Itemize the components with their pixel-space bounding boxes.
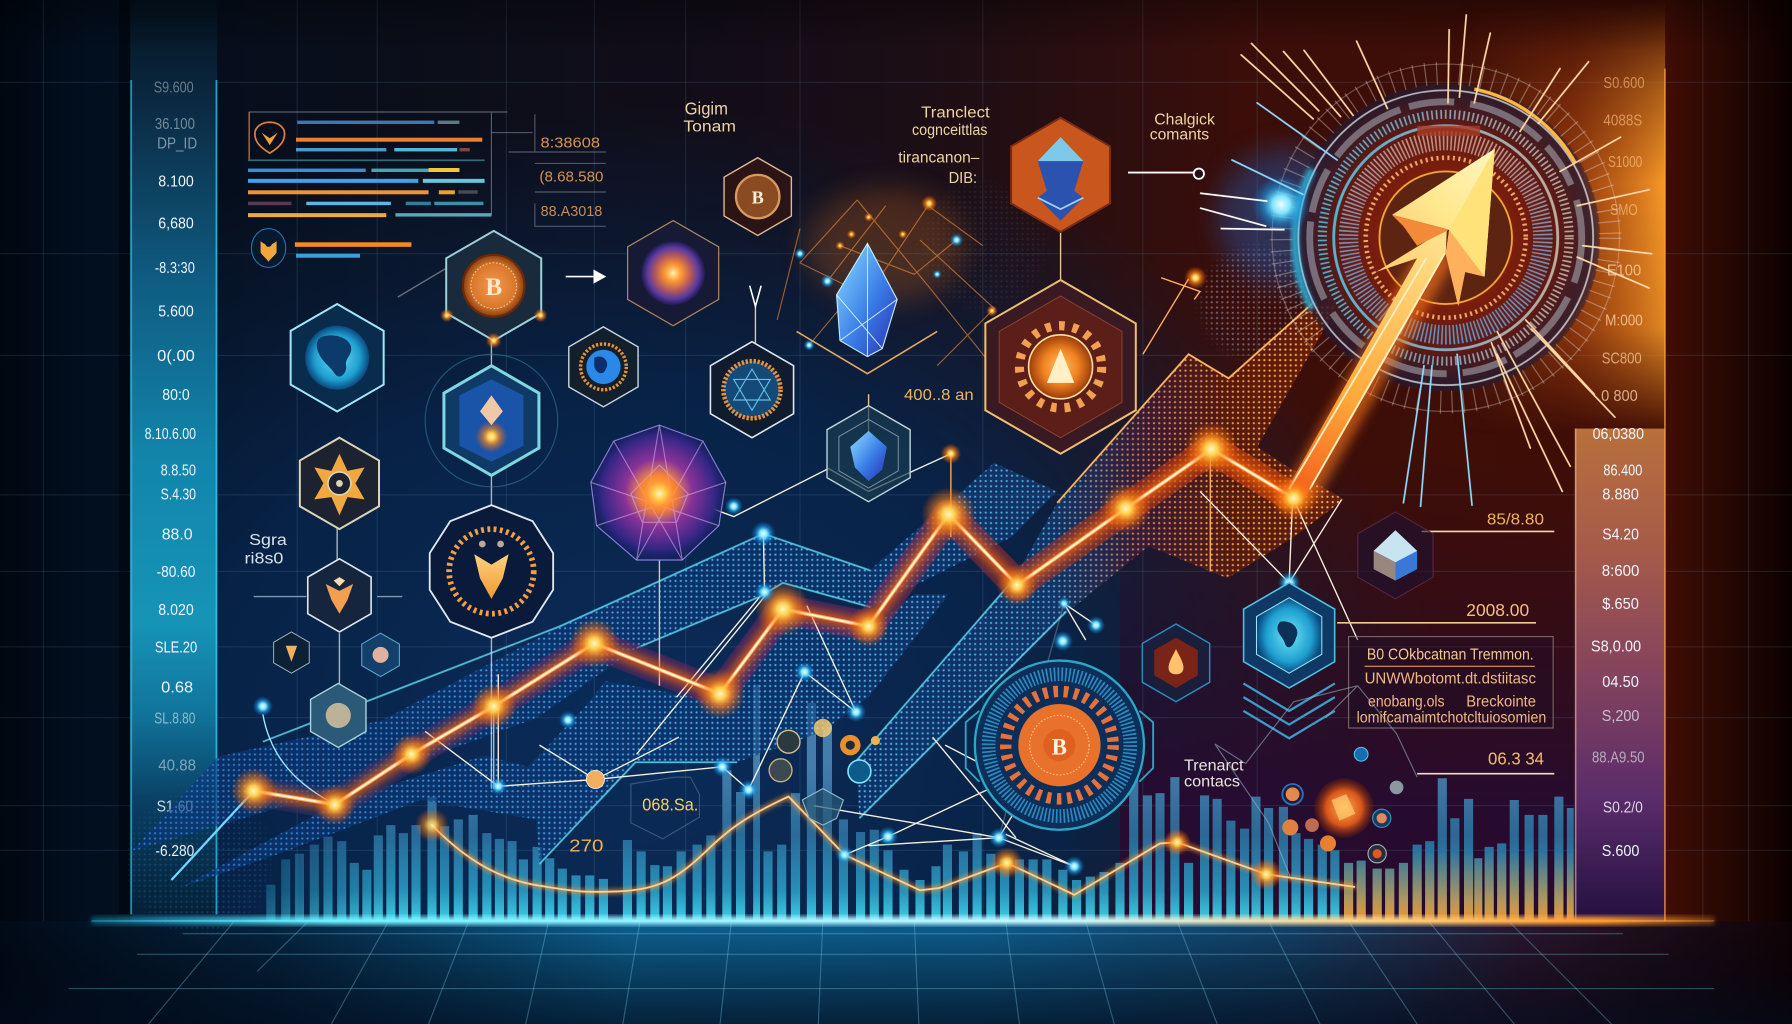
left scale labels: 8.020 (158, 602, 194, 619)
icon: small coin B hexagon: B (752, 187, 764, 207)
right scale labels: S0.600 (1603, 75, 1645, 92)
right scale labels (1591, 75, 1645, 860)
left scale labels: 40.88 (158, 757, 196, 774)
right scale labels: S4.20 (1602, 526, 1639, 543)
left scale labels: S9.600 (154, 80, 194, 97)
icon: large coin dial: B (1052, 734, 1067, 759)
right callouts: 2008.00 (1466, 600, 1529, 620)
right scale labels: SC800 (1602, 350, 1642, 367)
heading labels: ri8s0 (245, 550, 283, 567)
text box: contract notes: B0 COkbcatnan Tremmon. (1367, 646, 1534, 663)
heading labels: 400..8 an (904, 387, 974, 404)
heading labels: Chalgick (1154, 112, 1215, 129)
icon: web hexagon (710, 342, 794, 438)
left scale labels: 88.0 (162, 526, 193, 543)
heading labels: contacs (1184, 773, 1240, 790)
left scale labels: 5.600 (158, 304, 194, 321)
heading labels: Tranclect (921, 105, 990, 122)
right callouts: 06.3 34 (1488, 749, 1544, 769)
left scale labels: 6,680 (158, 216, 194, 233)
icon: shield core hexagon (425, 354, 558, 487)
panel: floor grid (0, 921, 1792, 1024)
right scale labels: 06,0380 (1593, 426, 1644, 443)
text box: contract notes: lomifcamaimtchotcltuiosomien (1357, 709, 1546, 726)
icon: right flame hexagon (1142, 624, 1210, 702)
left scale labels: S.4.30 (161, 486, 196, 503)
right scale labels: S0.2/0 (1603, 800, 1643, 817)
left scale labels: 8.8.50 (161, 462, 196, 479)
icon: star network (591, 425, 726, 560)
panel: right scale band (1575, 69, 1666, 921)
text box: contract notes: enobang.ols (1368, 693, 1445, 710)
heading labels: Tonam (683, 118, 736, 135)
chart nodes (231, 169, 1317, 890)
icon: shield chevron (255, 122, 285, 153)
bar chart (266, 685, 1574, 921)
line under glow stripe (254, 449, 1294, 805)
icon: shield badge (251, 229, 286, 267)
icon: small chain cluster (769, 719, 880, 825)
icon: central crystal with sparks (777, 189, 998, 374)
right scale labels: S8,0.00 (1591, 638, 1641, 655)
right callouts: 85/8.80 (1487, 512, 1544, 529)
icon: small badge right (362, 633, 399, 677)
arrow: small top connector (566, 271, 761, 306)
top data values: (8.68.580 (539, 170, 603, 186)
icon: small chevron hexagon (308, 559, 371, 632)
right scale labels: 88.A9.50 (1592, 749, 1645, 766)
left scale labels: 0.68 (161, 680, 193, 697)
right scale labels: S,200 (1602, 708, 1639, 725)
left scale labels: 8.10.6.00 (145, 426, 196, 443)
left scale labels: -8.3:30 (155, 260, 195, 277)
top data values: 88.A3018 (541, 204, 602, 220)
right scale labels: SMO (1610, 202, 1638, 219)
icon: star hexagon (300, 438, 379, 529)
icon: small globe hexagon (569, 327, 638, 407)
left scale labels: -80.60 (157, 564, 195, 581)
right scale labels: 04.50 (1602, 674, 1639, 691)
text box: contract notes: UNWWbotomt.dt.dstiitasc (1365, 670, 1536, 687)
heading labels: tirancanon– (898, 149, 980, 166)
right scale labels: S1000 (1608, 154, 1642, 171)
right scale labels: $.650 (1602, 596, 1639, 613)
icon: right cube hexagon (1358, 512, 1433, 599)
icon: coin B hexagon: B (485, 274, 502, 301)
left scale labels (145, 80, 197, 860)
text box: contract notes (1349, 637, 1553, 728)
heading labels: Gigim (685, 98, 728, 118)
right scale labels: 4088S (1603, 113, 1642, 130)
panel: top data table (248, 112, 507, 267)
heading labels: DIB: (949, 170, 977, 187)
arrow: large rising arrow (1278, 149, 1495, 510)
icon: lower crystal hexagon (827, 406, 910, 502)
panel: left scale band (119, 0, 217, 914)
burst rays (1232, 15, 1651, 506)
icon: pale hexagon (311, 683, 366, 747)
heading labels: 270 (569, 835, 603, 855)
icon: gold chevron badge (430, 505, 553, 638)
top data values (491, 114, 606, 226)
thin connector network (171, 173, 1358, 880)
left scale labels: SLE.20 (155, 640, 197, 657)
left scale labels: SL.8.80 (154, 710, 195, 727)
panel: right top orange glow (1470, 9, 1666, 428)
icon: ethereum hexagon (1011, 118, 1110, 232)
text box: contract notes: Breckointe (1466, 693, 1536, 710)
right callouts (1337, 512, 1554, 774)
right scale labels: 8:600 (1602, 563, 1639, 580)
hub: radial target burst (1200, 64, 1619, 411)
right scale labels: 0 800 (1601, 388, 1638, 405)
icon: large orange hexagon (985, 280, 1136, 454)
left scale labels: 80:0 (162, 387, 190, 404)
icon: fire network cluster (1215, 686, 1417, 880)
left scale labels: DP_ID (157, 136, 197, 153)
left scale labels: 8.100 (158, 173, 194, 190)
icon: coin B hexagon (440, 231, 547, 349)
top data values: 8:38608 (541, 135, 600, 151)
right scale labels: S.600 (1602, 843, 1639, 860)
icon: flame hexagon (628, 221, 719, 326)
panel: dotted ribbon chart (129, 183, 1344, 934)
right scale labels: 86.400 (1603, 462, 1642, 479)
left scale labels: S1.60 (157, 798, 193, 815)
icon: globe hexagon (291, 304, 384, 411)
heading labels: Sgra (249, 532, 287, 549)
left scale labels: 0(.00 (157, 348, 195, 365)
arrow: main orange growth line (254, 449, 1294, 805)
right scale labels: 8.880 (1602, 486, 1639, 503)
left scale labels: -6.280 (155, 843, 194, 860)
icon: large coin dial (966, 661, 1153, 830)
line: lower orange trend (432, 797, 1354, 895)
left scale labels: 36.100 (155, 116, 195, 133)
baseline glow (91, 917, 1714, 925)
icon: small badge left (274, 632, 309, 673)
heading labels: cognceittlas (912, 122, 988, 139)
heading labels: Trenarct (1184, 757, 1244, 774)
heading labels (245, 98, 1244, 855)
icon: small coin B hexagon (724, 158, 791, 235)
icon: right globe hexagon (1243, 583, 1335, 738)
right scale labels: M:000 (1605, 313, 1643, 330)
heading labels: 068.Sa. (642, 794, 698, 814)
right scale labels: E100 (1607, 262, 1641, 279)
heading labels: comants (1150, 126, 1209, 143)
